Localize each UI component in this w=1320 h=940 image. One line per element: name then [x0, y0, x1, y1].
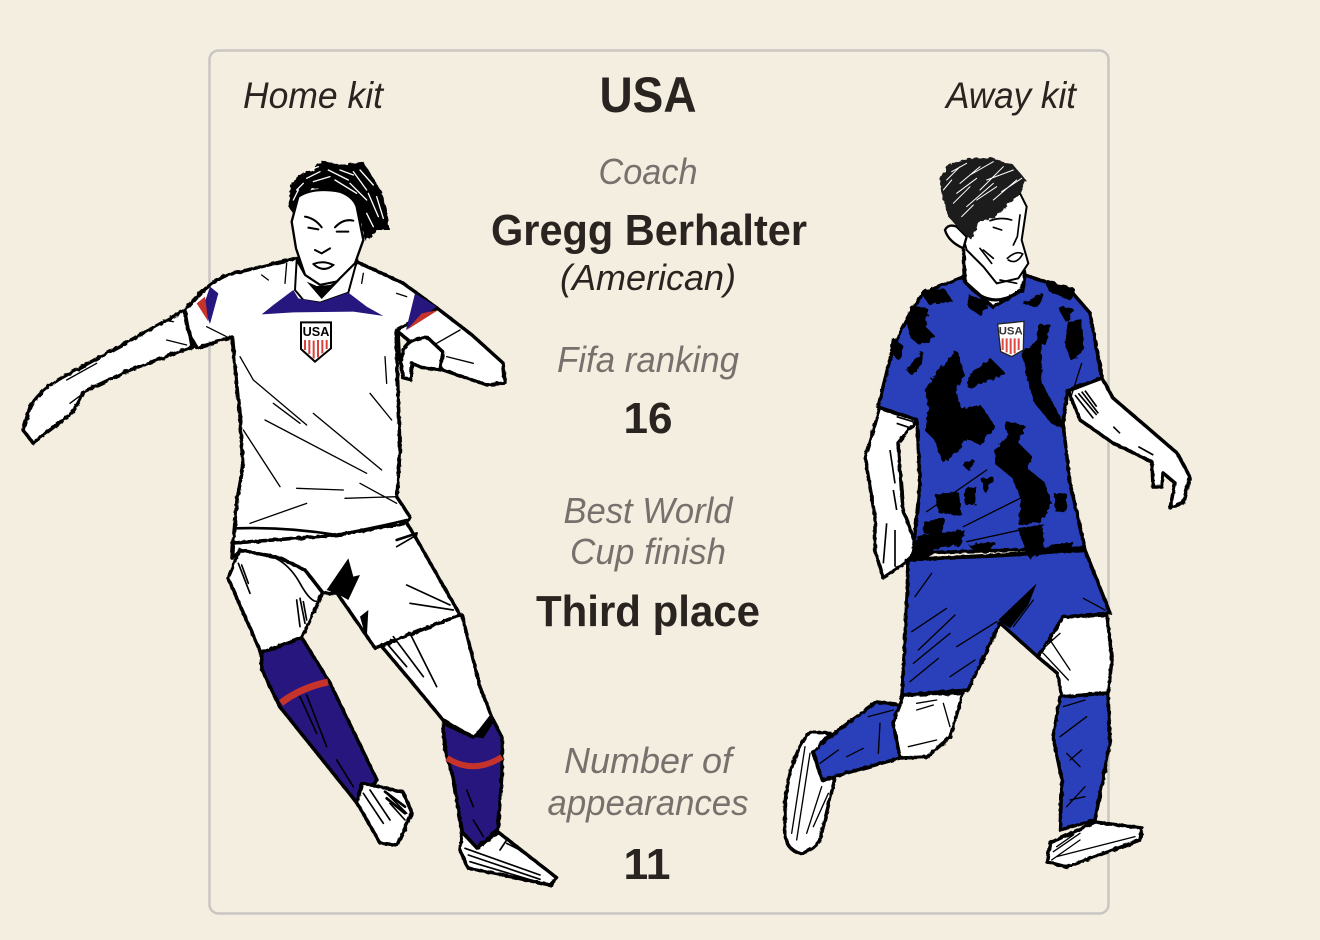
home player facial features — [305, 217, 353, 269]
away player face — [960, 193, 1028, 283]
value: coach name: Gregg Berhalter — [491, 206, 807, 255]
away player shirt — [878, 275, 1102, 553]
home player sleeve trim navy — [203, 287, 437, 330]
away player left arm — [865, 408, 918, 578]
home player face — [292, 190, 363, 285]
home player hair highlights — [293, 167, 383, 227]
away shirt black pattern — [892, 282, 1082, 558]
home player leg details — [238, 535, 540, 882]
away player left sock — [813, 702, 900, 780]
home player left sock — [261, 638, 377, 803]
home player right sock — [443, 720, 502, 848]
home player shorts — [232, 523, 460, 648]
away player right arm and hand — [1068, 378, 1190, 508]
away player right boot — [1047, 822, 1142, 867]
label: number of appearances: appearances — [548, 782, 748, 823]
illustration: away kit player — [785, 157, 1190, 867]
home player right arm — [396, 290, 505, 385]
away player neck — [963, 240, 1025, 307]
home player upper details: head, trim and crest — [67, 161, 490, 540]
label: coach: Coach — [598, 151, 698, 192]
away player lower shading — [792, 573, 1135, 860]
label: number of appearances: Number of — [564, 740, 736, 781]
label: best world cup finish — [564, 490, 733, 572]
away player left knee — [893, 693, 963, 758]
away shirt folds — [927, 363, 1082, 542]
away shirt hem and collar — [880, 282, 1102, 558]
label: best world cup finish: Best World — [564, 490, 733, 531]
away player left boot — [785, 732, 835, 853]
away player hair highlights — [943, 162, 1022, 217]
home player sleeve trim red — [197, 297, 438, 330]
home player neck — [295, 260, 357, 303]
card panel border — [210, 50, 1108, 914]
home player crest: USA — [303, 325, 329, 339]
home player right boot — [460, 832, 557, 885]
home player neck shadow — [307, 280, 340, 299]
home sock stripes — [281, 682, 502, 766]
home player right thigh — [378, 615, 493, 737]
away player facial features — [980, 215, 1023, 283]
home player shirt folds — [67, 263, 490, 523]
away player hair — [939, 157, 1026, 240]
away player ear — [945, 226, 967, 248]
label: fifa ranking: Fifa ranking — [557, 339, 739, 380]
away player crest: USA — [999, 325, 1023, 337]
away player shorts — [902, 550, 1110, 695]
away player upper details: head, shirt pattern and crest — [880, 157, 1153, 567]
illustration: home kit player — [23, 161, 557, 885]
home player hair — [288, 161, 390, 240]
home player crest — [301, 322, 331, 362]
value: appearances: 11 — [624, 840, 670, 889]
title: USA: USA — [600, 67, 696, 123]
label: best world cup finish: Cup finish — [570, 531, 726, 572]
value: fifa ranking: 16 — [624, 394, 672, 443]
home player fist — [401, 338, 443, 380]
away player crest — [998, 321, 1024, 357]
away player right thigh — [1038, 615, 1112, 697]
home player left thigh — [228, 550, 323, 653]
label: away kit: Away kit — [944, 75, 1078, 116]
home player shirt — [185, 258, 437, 543]
value: coach nationality: (American) — [560, 257, 736, 298]
home player left boot — [357, 783, 412, 845]
away player right sock — [1053, 693, 1110, 830]
label: home kit: Home kit — [243, 75, 385, 116]
home player left arm — [23, 310, 197, 443]
value: best finish: Third place — [536, 587, 760, 636]
label: number of appearances — [548, 740, 748, 823]
away arm shading — [883, 391, 1153, 567]
home player collar trim — [262, 290, 383, 316]
